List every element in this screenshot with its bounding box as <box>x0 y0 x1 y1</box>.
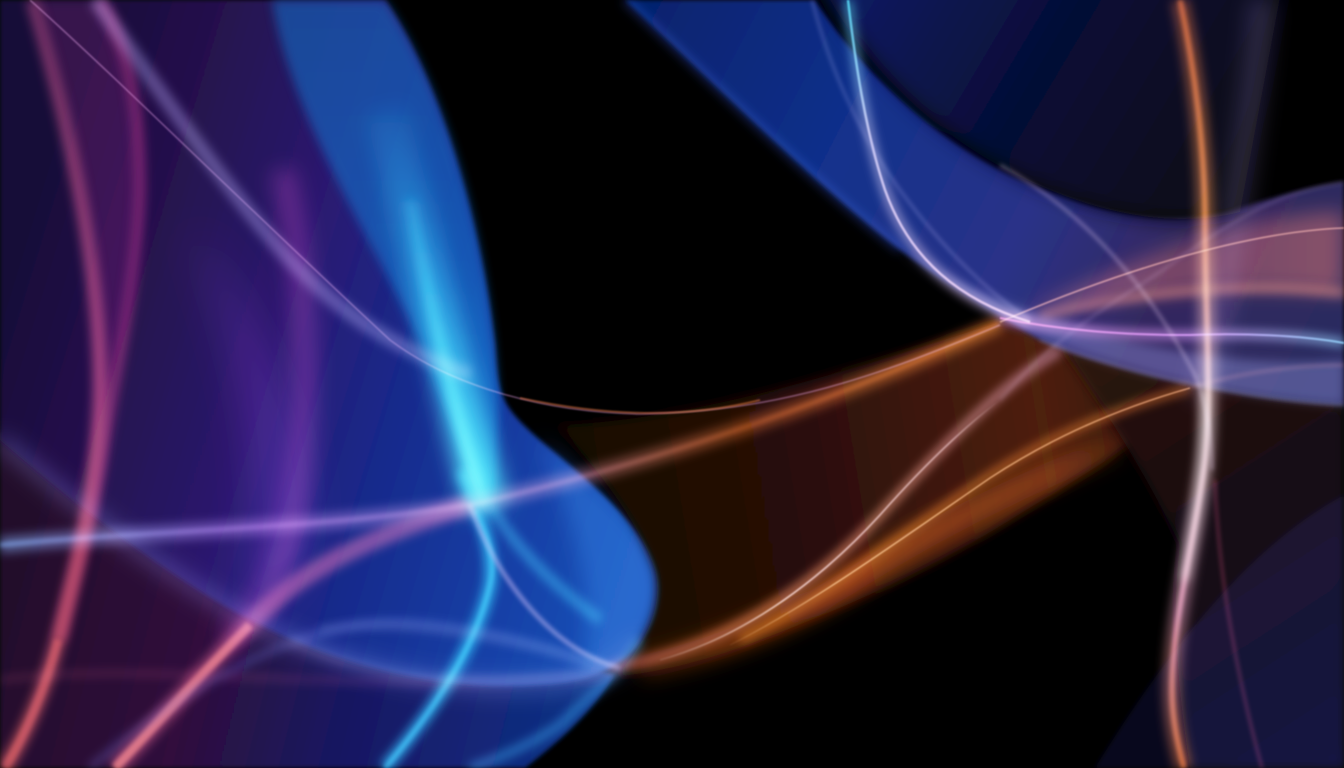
panel: lower-left dark ribbon <box>0 430 615 768</box>
line: pale violet vertical ribbon <box>1200 0 1262 400</box>
panel: left red-pink vertical bands <box>5 0 305 768</box>
panel: right dark ribbon <box>1060 345 1344 768</box>
panel: orange-brown central ribbon <box>555 322 1190 677</box>
line: bright cyan curve into lower blue ribbon <box>320 470 640 768</box>
panel: top-right blue ribbon <box>625 0 1344 405</box>
line: thin arc from top left to centre <box>30 0 1000 414</box>
panel: large blue-violet ribbon <box>0 0 660 686</box>
panel: bright blue vertical band <box>272 0 498 520</box>
line: magenta and blue horizontal glow <box>1000 182 1344 405</box>
panel: lower-left pink beam <box>0 505 615 768</box>
line: cyan-white curve from top <box>812 0 1212 470</box>
line: flowing pink and orange waves <box>610 350 1344 668</box>
line: horizontal beam across the centre <box>0 323 1000 545</box>
line: tall orange-white vertical beam <box>1172 0 1262 768</box>
panel: right orange swoosh <box>1000 212 1344 322</box>
